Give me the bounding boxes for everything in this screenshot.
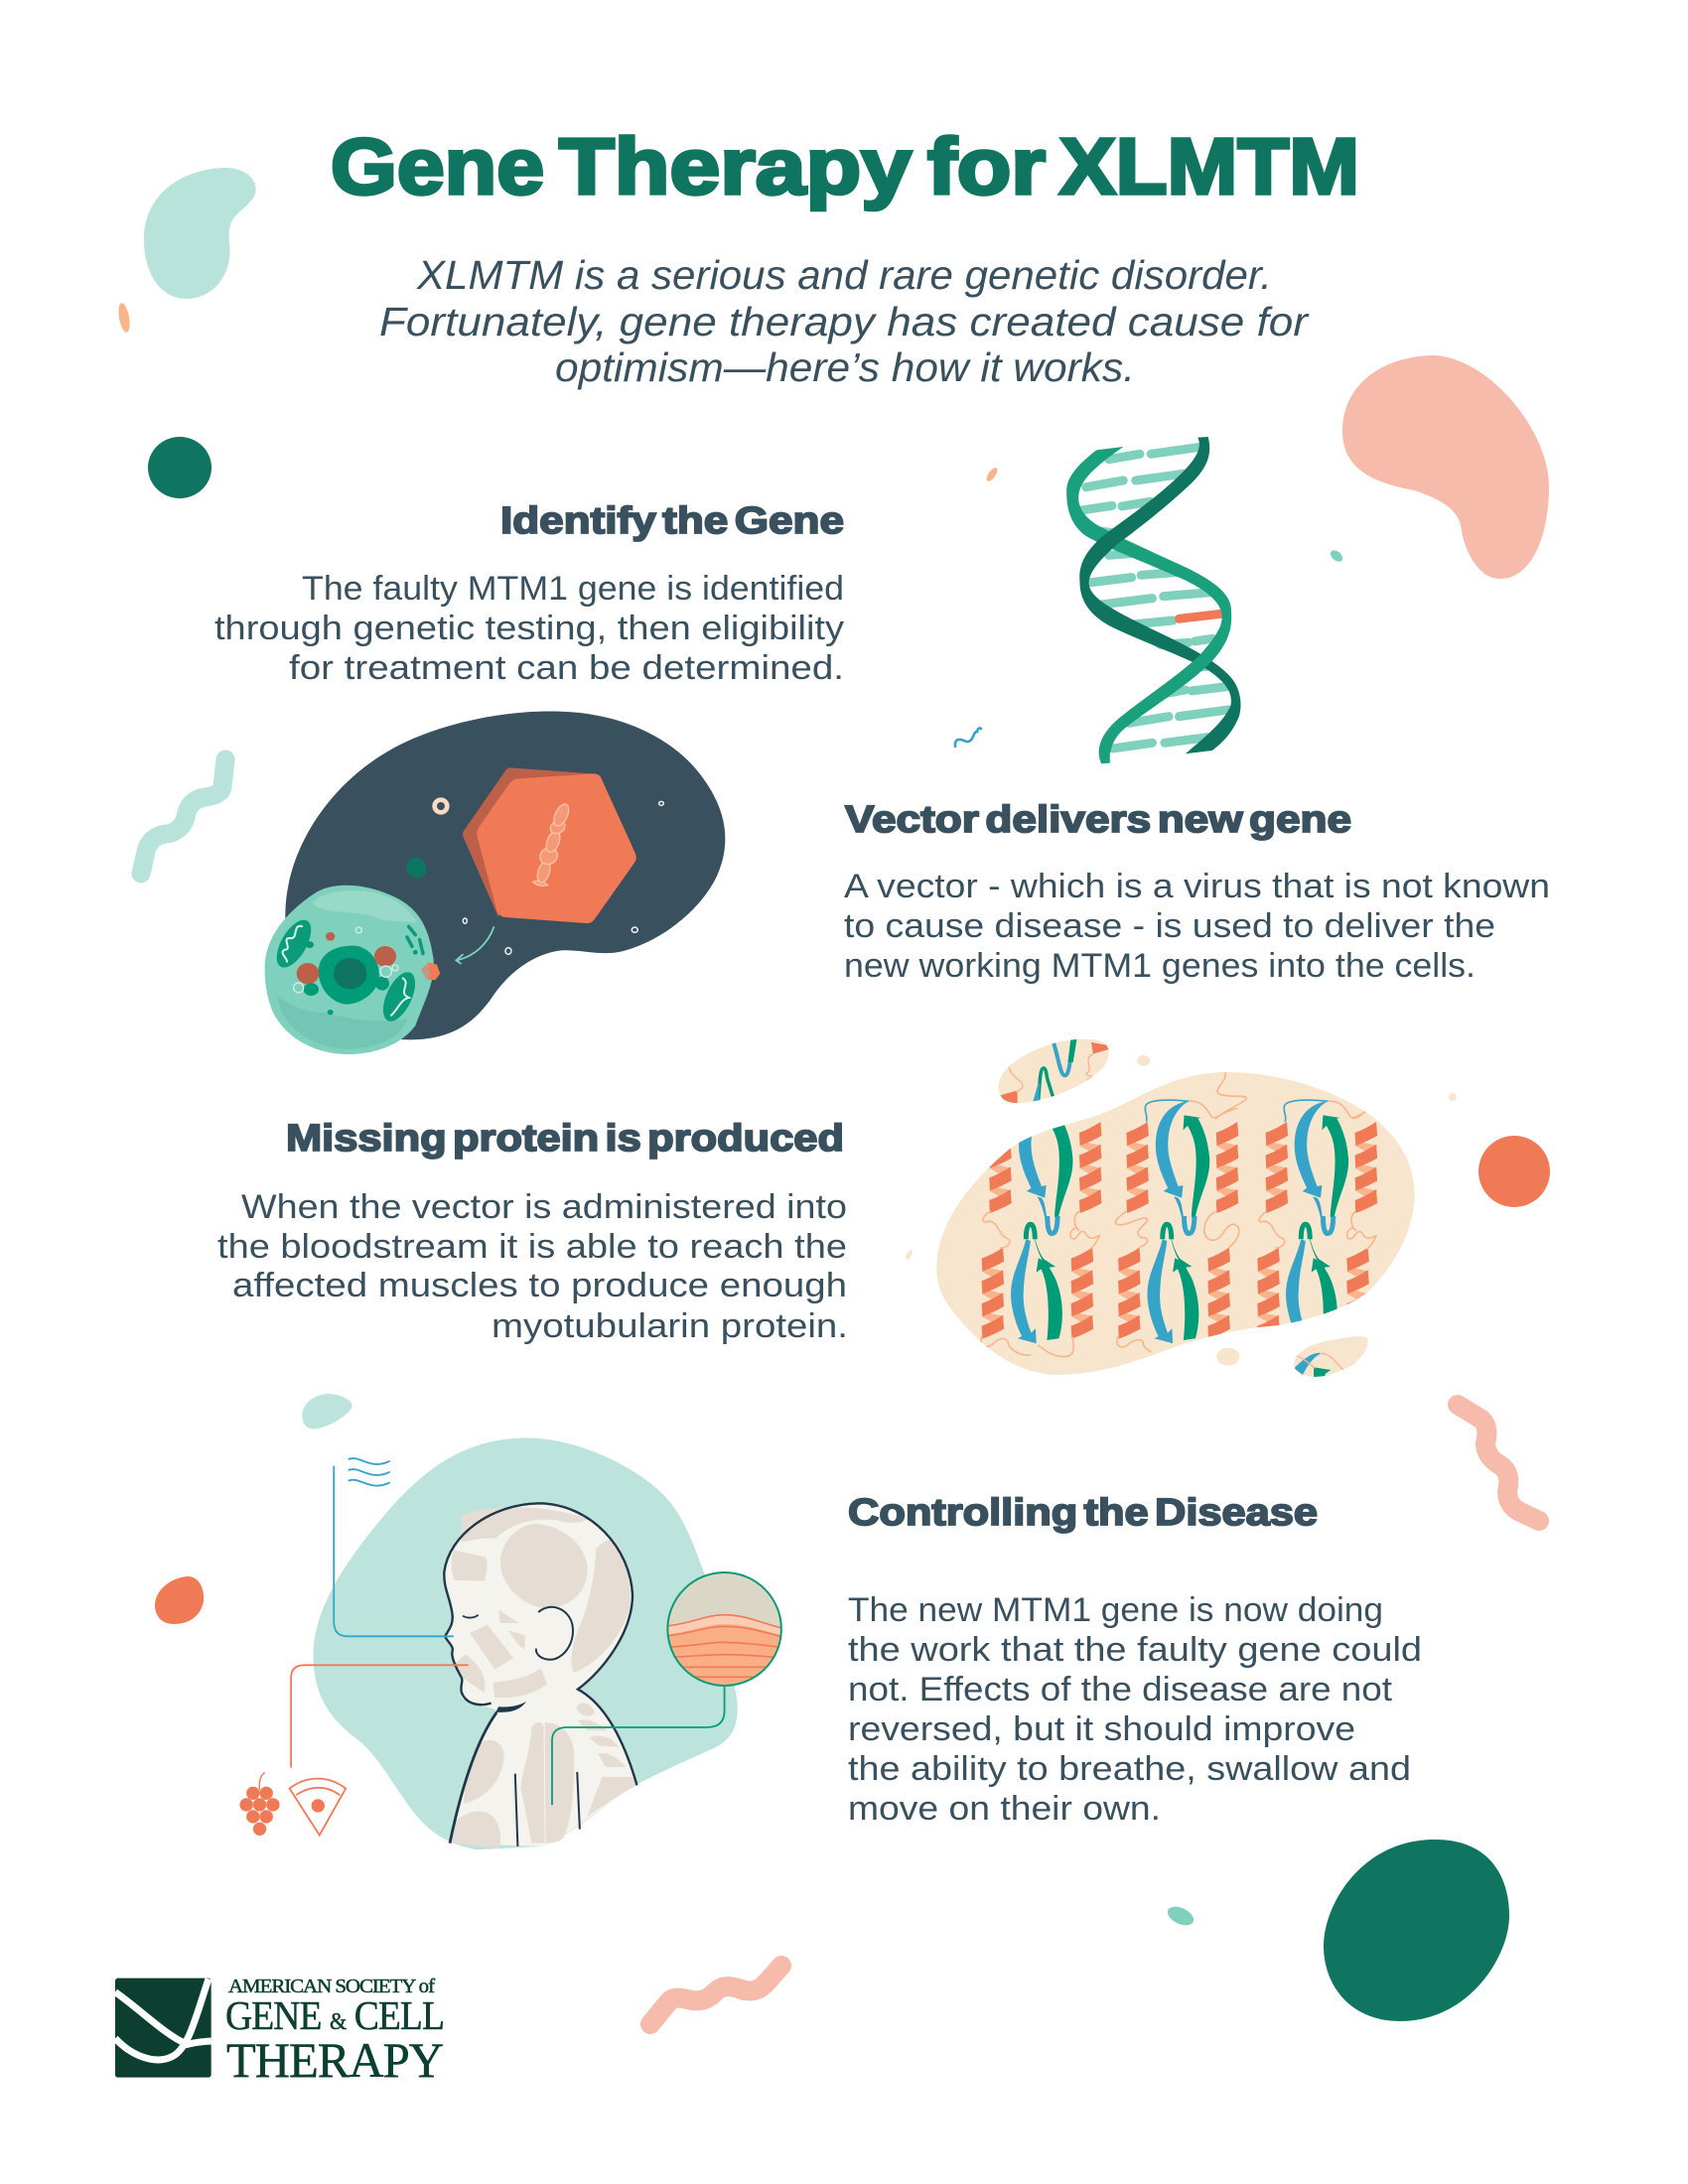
text: controlling the disease: not. Effects of the disease are not [848, 1671, 1393, 1708]
decorative speck: teal near DNA [1329, 548, 1344, 564]
text: controlling the disease [848, 1591, 1422, 1828]
decorative speck: orange [116, 302, 132, 334]
DNA light strand overlap [1150, 628, 1230, 710]
small ring particles [463, 801, 663, 954]
heading: identify the gene: Identify the Gene [500, 500, 844, 542]
heading: controlling the disease: Controlling the Disease [848, 1492, 1318, 1534]
small cream blob with strand fragment [1294, 1336, 1368, 1378]
intro text: XLMTM is a serious and rare genetic disorder. [416, 252, 1272, 298]
DNA mutated rung [1180, 614, 1221, 618]
main cream blob [936, 1072, 1415, 1375]
text: missing protein: myotubularin protein. [492, 1307, 848, 1345]
decorative speck: teal [1165, 1903, 1196, 1929]
logo wordmark [225, 1976, 444, 2088]
decorative wave: teal left [141, 759, 225, 874]
text: missing protein: When the vector is administered into [241, 1188, 847, 1226]
child outline [444, 1503, 636, 1785]
text: controlling the disease: the work that the faulty gene could [848, 1631, 1422, 1669]
logo wordmark: THERAPY [226, 2032, 443, 2088]
intro text: Fortunately, gene therapy has created cause for [379, 299, 1311, 344]
cell [265, 886, 440, 1054]
text: identify the gene: The faulty MTM1 gene is identified [302, 570, 844, 608]
callout line: muscle [552, 1686, 725, 1805]
arrow to cell [456, 927, 493, 964]
muscle patches [451, 1507, 636, 1848]
title: Gene [331, 122, 544, 210]
decorative circle: dark green [148, 437, 211, 498]
decorative blob: orange left [155, 1576, 204, 1624]
title [331, 122, 1359, 210]
decorative wave: pink right [1458, 1405, 1539, 1521]
text: vector delivers new gene: to cause disease - is used to deliver the [844, 907, 1495, 945]
heading: vector delivers new gene: Vector delivers new gene [845, 799, 1351, 841]
mitochondria [270, 914, 318, 973]
decorative blob: dark green bottom right [1324, 1840, 1509, 2021]
teal background blob [313, 1437, 738, 1849]
logo [115, 1976, 444, 2088]
text: identify the gene [214, 570, 844, 687]
title: XLMTM [1059, 122, 1359, 210]
decorative speck: cream [1449, 1093, 1457, 1101]
DNA light strand [1066, 447, 1231, 763]
ear [536, 1607, 573, 1660]
icon: grapes [239, 1773, 280, 1836]
text: controlling the disease: The new MTM1 gene is now doing [848, 1591, 1383, 1629]
intro text [379, 252, 1311, 390]
muscle tissue lens [666, 1571, 782, 1687]
DNA dark strand [1079, 437, 1241, 753]
logo wordmark: AMERICAN SOCIETY of [228, 1976, 435, 1997]
green dot [406, 858, 426, 879]
heading: missing protein: Missing protein is produced [286, 1118, 844, 1160]
illustration: vector and cell [265, 712, 725, 1054]
small teal blob [302, 1394, 352, 1429]
icon: DNA double helix [1066, 437, 1241, 763]
cream specks [905, 1055, 1240, 1366]
small cream blob with protein fragment [999, 1039, 1110, 1105]
child silhouette [444, 1503, 636, 1848]
DNA base rungs [1082, 448, 1229, 749]
protein helices and strands [981, 1072, 1377, 1357]
callout line: swallowing [291, 1665, 469, 1768]
logo mark [115, 1979, 211, 2078]
decorative wave: pink bottom [650, 1966, 781, 2024]
dark background blob [285, 712, 725, 1039]
text: controlling the disease: move on their own. [848, 1790, 1161, 1828]
text: vector delivers new gene: A vector - which is a virus that is not known [844, 868, 1550, 905]
text: controlling the disease: the ability to breathe, swallow and [848, 1750, 1411, 1788]
text: vector delivers new gene: new working MTM1 genes into the cells. [844, 947, 1476, 985]
mini DNA inside capsid [533, 802, 572, 886]
vector docking on cell [421, 962, 440, 980]
illustration: child anatomy [239, 1394, 786, 1849]
closed eye [463, 1615, 479, 1618]
organelles [297, 963, 319, 984]
decorative squiggle: blue [955, 728, 981, 747]
title: for [927, 122, 1046, 210]
decorative speck: orange near DNA [985, 466, 999, 483]
intro text: optimism—here’s how it works. [555, 344, 1135, 390]
nucleus [319, 946, 379, 1005]
decorative blob: pink top right [1342, 355, 1549, 579]
illustration: protein structures [905, 1039, 1415, 1378]
icon: pizza slice [290, 1779, 346, 1836]
text: vector delivers new gene [844, 868, 1550, 985]
callout line: breathing [334, 1458, 454, 1636]
logo wordmark: GENE & CELL [225, 1992, 444, 2038]
title: Therapy [559, 122, 913, 210]
text: identify the gene: for treatment can be determined. [289, 649, 844, 687]
text: controlling the disease: reversed, but it should improve [848, 1710, 1355, 1748]
text: missing protein [217, 1188, 848, 1345]
icon: air waves [349, 1458, 390, 1486]
vector capsid hexagon [463, 767, 636, 923]
text: missing protein: affected muscles to produce enough [232, 1267, 847, 1304]
decorative blob: teal top left [144, 168, 256, 299]
text: missing protein: the bloodstream it is able to reach the [217, 1228, 847, 1266]
decorative circle: orange [1478, 1136, 1550, 1207]
text: identify the gene: through genetic testing, then eligibility [214, 610, 844, 647]
cream ring [435, 800, 447, 812]
